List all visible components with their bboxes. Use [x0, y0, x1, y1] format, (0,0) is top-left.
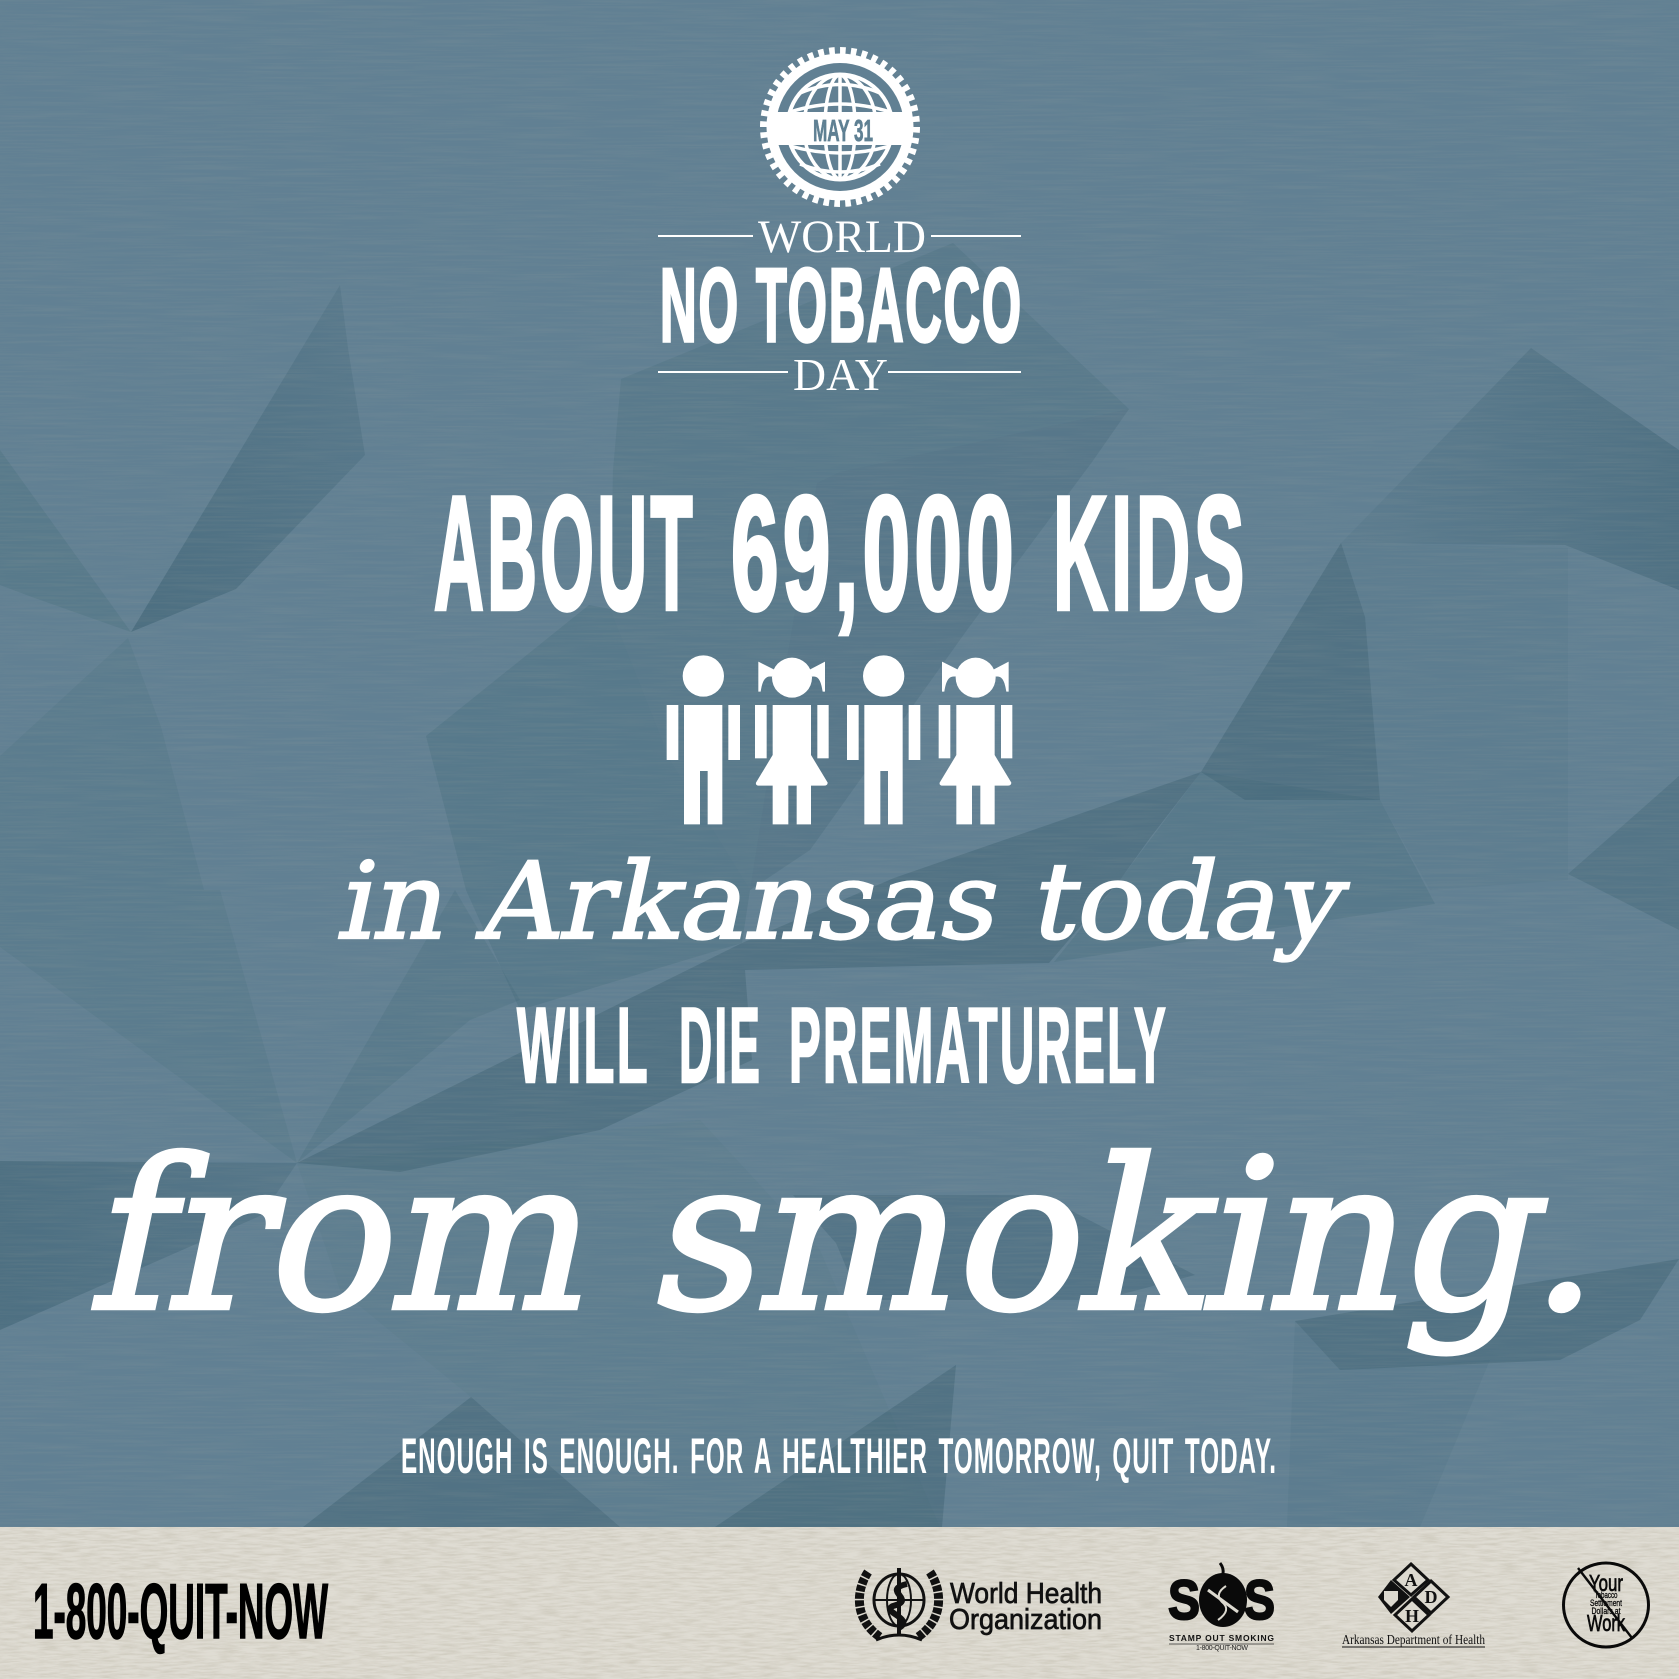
logo: Your Tobacco Settlement Dollars at Work: Your	[1589, 1570, 1623, 1596]
footer band	[0, 1527, 1679, 1679]
heading: World No Tobacco Day: DAY	[793, 349, 888, 400]
infographic canvas: PREMATURELY	[789, 985, 1168, 1105]
logo: Your Tobacco Settlement Dollars at Work	[1564, 1563, 1648, 1647]
logo: Stamp Out Smoking: 1-800-QUIT-NOW	[1196, 1645, 1248, 1652]
logo: World Health Organization	[859, 1568, 1102, 1640]
name: World Health	[950, 1578, 1102, 1610]
heading: World No Tobacco Day	[658, 211, 1023, 400]
emblem	[859, 1568, 939, 1640]
heading: World No Tobacco Day: NO	[660, 248, 740, 364]
logo: Your Tobacco Settlement Dollars at Work: Settlement	[1590, 1598, 1622, 1608]
logo: Arkansas Department of Health	[1342, 1564, 1485, 1648]
logo: Arkansas Department of Health: D	[1424, 1587, 1438, 1607]
logo: Stamp Out Smoking	[1168, 1563, 1275, 1652]
icon: girl 1	[755, 658, 829, 824]
icon: girl 2	[939, 658, 1012, 824]
headline: from smoking: from smoking.	[75, 1115, 1636, 1357]
logo: Stamp Out Smoking: STAMP OUT SMOKING	[1169, 1633, 1274, 1643]
logo: Your Tobacco Settlement Dollars at Work: Dollars at	[1592, 1606, 1621, 1616]
logo: World Health Organization: Organization	[949, 1604, 1102, 1636]
logo: May 31 globe badge	[764, 51, 916, 203]
headline: will die prematurely	[517, 985, 1168, 1105]
logo: Stamp Out Smoking: S	[1244, 1568, 1275, 1631]
headline: About 69,000 kids: 69,000	[731, 463, 1018, 644]
icon: boy 2	[847, 655, 920, 824]
headline: in Arkansas today: in Arkansas today	[330, 841, 1359, 964]
infographic canvas: KIDS	[1053, 463, 1248, 644]
headline: About 69,000 kids: ABOUT	[434, 463, 696, 644]
logo: Stamp Out Smoking: S	[1168, 1568, 1200, 1631]
icon group: four children	[667, 655, 1012, 824]
logo: Arkansas Department of Health: Arkansas Department of Health	[1342, 1633, 1485, 1648]
infographic canvas: 1-800-QUIT-NOW	[33, 1567, 328, 1655]
background: faceted polygons	[0, 243, 1679, 1527]
logo: Arkansas Department of Health: A	[1404, 1570, 1418, 1590]
logo: Arkansas Department of Health: H	[1405, 1606, 1419, 1626]
headline: will die prematurely: DIE	[679, 985, 762, 1105]
date label: MAY 31	[813, 113, 873, 148]
globe grid	[788, 74, 892, 180]
logo: Your Tobacco Settlement Dollars at Work: Tobacco	[1594, 1590, 1618, 1600]
icon: boy 1	[667, 655, 740, 824]
infographic canvas: TOBACCO	[756, 248, 1023, 364]
headline: will die prematurely: WILL	[517, 985, 650, 1105]
logo: Your Tobacco Settlement Dollars at Work: Work	[1587, 1610, 1625, 1636]
heading: World No Tobacco Day: WORLD	[758, 211, 926, 263]
